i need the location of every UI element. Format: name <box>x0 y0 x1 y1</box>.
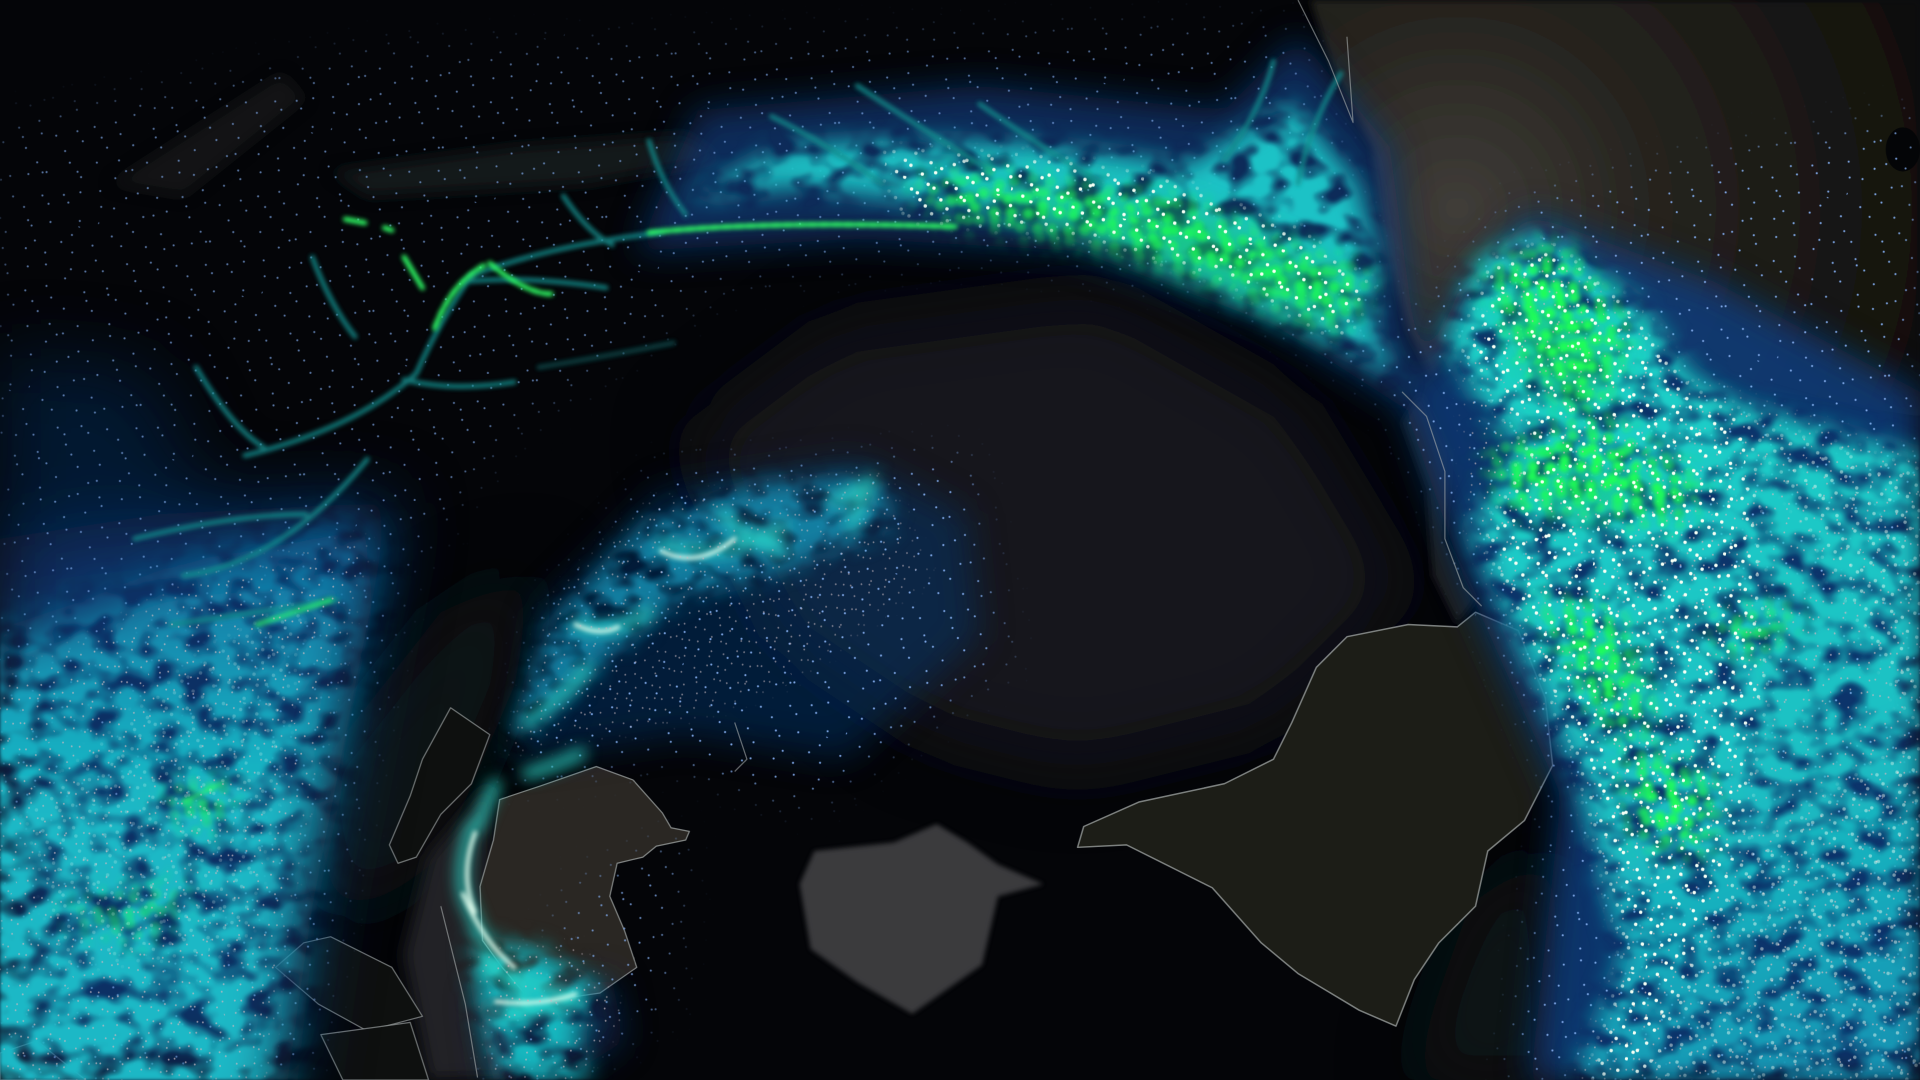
land: grey shelf <box>110 73 722 1080</box>
pale storm points <box>0 237 1920 1080</box>
dark sea floor centre <box>306 294 1555 1080</box>
land: island continent <box>480 767 689 1003</box>
haze: deep blue density, eastern and northern bands <box>478 37 1920 1080</box>
land: western landmasses outlines <box>0 708 490 1080</box>
teal blob below the island continent <box>471 943 600 1080</box>
white hot track cores <box>463 539 735 1003</box>
land: central isthmus <box>1402 392 1476 624</box>
bright tracks around the island continent <box>462 484 869 1012</box>
storm band: western basin teal <box>0 527 373 1080</box>
thin cyclone tracks: north-west <box>135 61 1341 624</box>
land: polar ice sheet <box>800 824 1043 1014</box>
land: northern continent top right <box>1310 0 1920 416</box>
green glowing storm points <box>56 158 1811 951</box>
haze: deep blue density, western band <box>0 355 392 1080</box>
storm band: north Pacific teal arc <box>686 104 1402 389</box>
soft green wash under storm cores <box>931 184 1690 735</box>
land: southern continent <box>1078 612 1553 1026</box>
storm band: inner arc teal <box>508 478 894 753</box>
green core tracks <box>184 219 955 802</box>
coast outlines over the isthmus <box>441 0 1482 1078</box>
storm band: eastern basin teal <box>1445 233 1920 1080</box>
